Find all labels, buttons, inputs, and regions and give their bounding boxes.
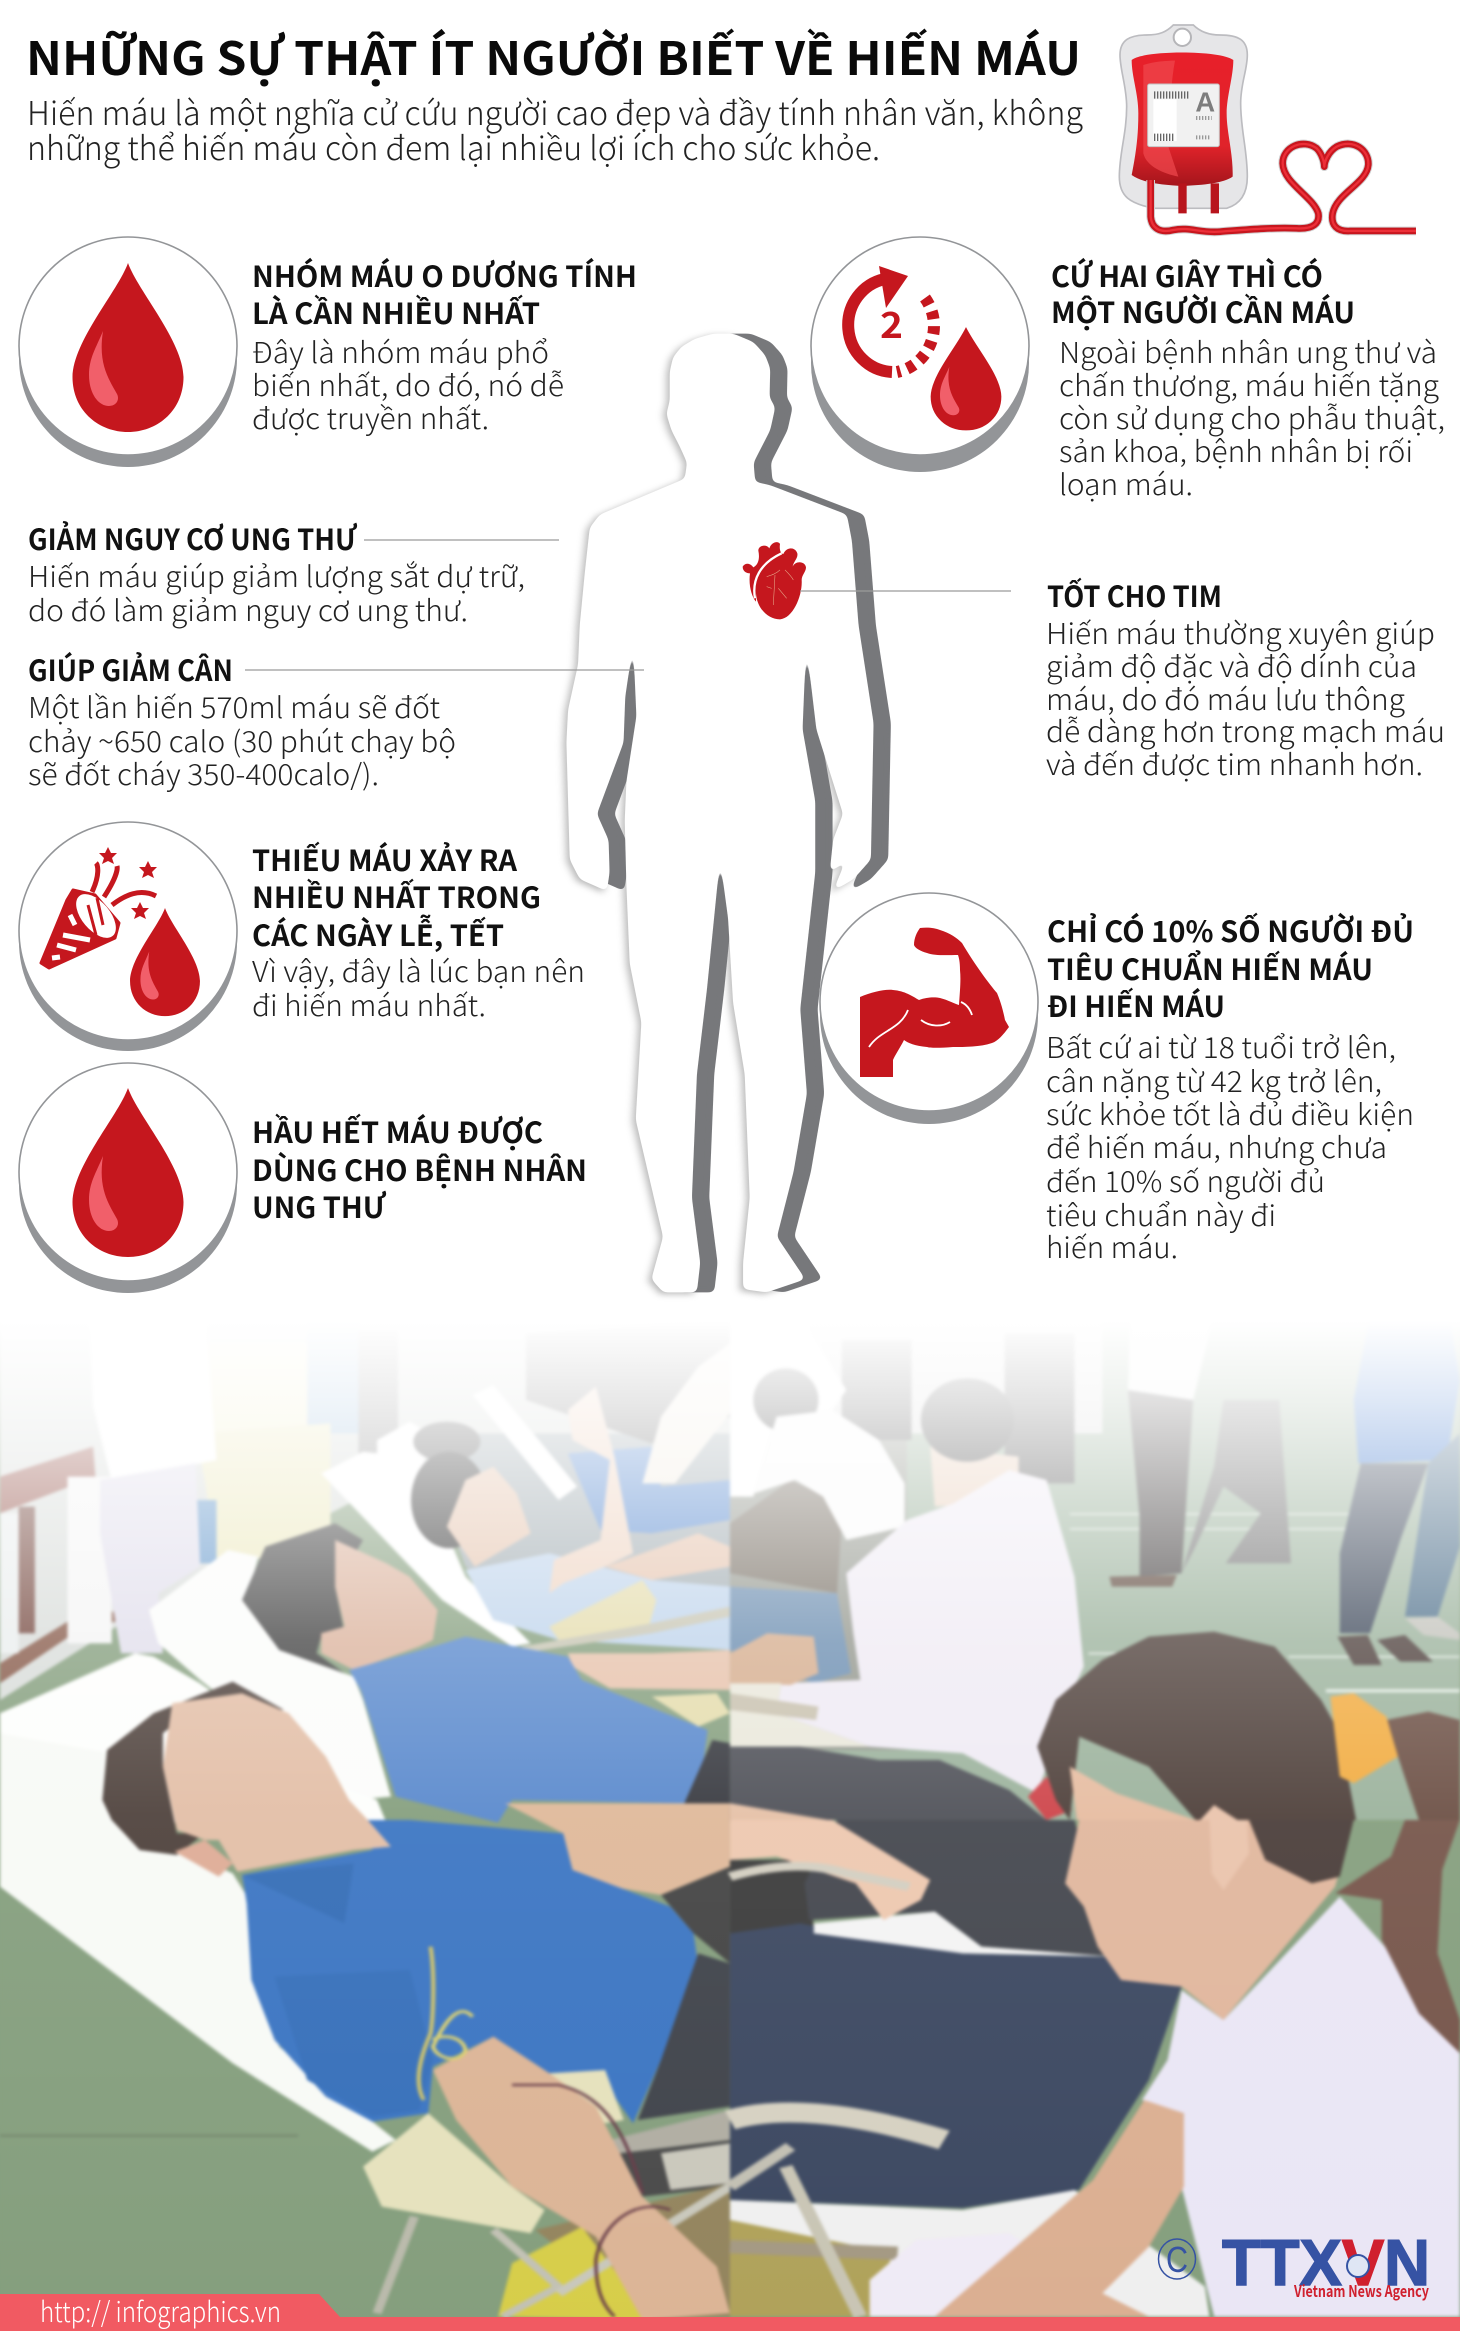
heading: UNG THƯ (252, 1185, 387, 1227)
panel: chỉ có 10% đủ tiêu chuẩn (820, 893, 1414, 1267)
heading (1051, 254, 1355, 332)
icon: two-second timer with drop: 2 (880, 297, 903, 349)
body text: loạn máu. (1059, 462, 1193, 504)
title: NHỮNG SỰ THẬT ÍT NGƯỜI BIẾT VỀ HIẾN MÁU (26, 23, 1081, 89)
body text: Vì vậy, đây là lúc bạn nên (252, 949, 585, 991)
body text: dễ dàng hơn trong mạch máu (1046, 709, 1445, 751)
body text: máu, do đó máu lưu thông (1046, 677, 1405, 719)
human body silhouette (563, 334, 891, 1294)
icon: heart organ (743, 542, 806, 619)
body text: được truyền nhất. (252, 396, 489, 438)
body text: sức khỏe tốt là đủ điều kiện (1046, 1092, 1414, 1134)
body text (252, 949, 585, 1025)
photo region: front donor with blue shirt (0, 1801, 732, 2317)
heading: CỨ HAI GIÂY THÌ CÓ (1051, 254, 1323, 296)
panel: giảm nguy cơ ung thư (28, 517, 525, 630)
heading: NHÓM MÁU O DƯƠNG TÍNH (252, 254, 637, 296)
panel: nhóm máu O dương tính (19, 237, 637, 467)
panel: thiếu máu ngày lễ tết (19, 822, 585, 1051)
photo fade overlay (0, 1300, 1460, 2331)
body text: đi hiến máu nhất. (252, 983, 486, 1025)
footer bar with website tab: http:// infographics.vn (40, 2291, 281, 2331)
heading: GIẢM NGUY CƠ UNG THƯ (28, 517, 358, 559)
subtitle (27, 87, 1083, 170)
logo: TTXVN Vietnam News Agency: C (1166, 2239, 1188, 2280)
logo: TTXVN Vietnam News Agency: TTXVN (1222, 2226, 1430, 2299)
heading: CÁC NGÀY LỄ, TẾT (252, 913, 504, 955)
body text: tiêu chuẩn này đi (1046, 1193, 1276, 1235)
body text (252, 330, 564, 438)
body text: giảm độ đặc và độ dính của (1046, 644, 1417, 686)
body text (1059, 330, 1445, 504)
panel: hầu hết máu cho bệnh nhân ung thư (19, 1063, 587, 1293)
body text: sản khoa, bệnh nhân bị rối (1059, 429, 1413, 471)
body text: và đến được tim nhanh hơn. (1046, 742, 1423, 784)
body text (28, 685, 456, 794)
leader lines (245, 540, 1011, 670)
body text: Hiến máu thường xuyên giúp (1046, 611, 1435, 653)
heading: LÀ CẦN NHIỀU NHẤT (252, 291, 540, 333)
icon: blood drop in circle (19, 1063, 237, 1293)
photo region: hall backdrop and standing nurse (0, 1350, 731, 1701)
heading: TIÊU CHUẨN HIẾN MÁU (1047, 947, 1373, 989)
body text (1046, 611, 1445, 784)
heading: TỐT CHO TIM (1047, 574, 1222, 616)
heading (1047, 909, 1414, 1026)
heading: MỘT NGƯỜI CẦN MÁU (1051, 290, 1355, 332)
photo: blood donors lying on beds (0, 1300, 1460, 2331)
heading (252, 1110, 587, 1227)
body text: Hiến máu giúp giảm lượng sắt dự trữ, (28, 554, 525, 596)
body text: Ngoài bệnh nhân ung thư và (1059, 330, 1437, 372)
photo region: nurse in foreground and pants (730, 1820, 1460, 2317)
icon: blood bag with heart tube: A (1195, 86, 1215, 117)
photo region: front donor head (102, 1682, 391, 1877)
photo region: far donors and second donor (0, 1387, 730, 1823)
heading: GIÚP GIẢM CÂN (28, 648, 233, 690)
body text: chảy ~650 calo (30 phút chạy bộ (28, 719, 456, 761)
heading: ĐI HIẾN MÁU (1047, 984, 1225, 1026)
heading: DÙNG CHO BỆNH NHÂN (252, 1148, 587, 1190)
body text: chấn thương, máu hiến tặng (1059, 363, 1439, 405)
body text: Bất cứ ai từ 18 tuổi trở lên, (1046, 1025, 1396, 1067)
body text: biến nhất, do đó, nó dễ (252, 363, 564, 405)
subtitle: Hiến máu là một nghĩa cử cứu người cao đẹp và đầy tính nhân văn, không (27, 87, 1083, 135)
photo region: nurse hair and scrunchie (1037, 1632, 1460, 1820)
footer bar with website tab (0, 2291, 1460, 2331)
panel: cứ hai giây (811, 237, 1445, 504)
body text (1046, 1025, 1414, 1267)
panel: giúp giảm cân (28, 648, 456, 794)
heading: NHIỀU NHẤT TRONG (252, 875, 541, 917)
heading: THIẾU MÁU XẢY RA (252, 838, 517, 880)
heading: CHỈ CÓ 10% SỐ NGƯỜI ĐỦ (1047, 909, 1414, 951)
body text: hiến máu. (1046, 1225, 1178, 1267)
photo region: right background, standing people and floor (730, 1300, 1460, 1820)
icon: party popper with drop (19, 822, 237, 1051)
icon: blood bag with heart tube (1119, 25, 1416, 232)
icon: two-second timer with drop (811, 237, 1029, 472)
body text: Đây là nhóm máu phổ (252, 330, 549, 372)
heading: HẦU HẾT MÁU ĐƯỢC (252, 1110, 543, 1152)
subtitle: những thể hiến máu còn đem lại nhiều lợi ích cho sức khỏe. (27, 122, 880, 170)
body text: Một lần hiến 570ml máu sẽ đốt (28, 685, 440, 727)
body text: sẽ đốt cháy 350-400calo/). (28, 752, 379, 794)
body text: còn sử dụng cho phẫu thuật, (1059, 396, 1445, 438)
heading (252, 254, 637, 333)
body text: để hiến máu, nhưng chưa (1046, 1125, 1387, 1167)
body text (28, 554, 525, 630)
body text: do đó làm giảm nguy cơ ung thư. (28, 588, 468, 630)
icon: flexed arm in circle (820, 893, 1038, 1124)
body text: đến 10% số người đủ (1046, 1159, 1325, 1201)
icon: blood drop in circle (19, 237, 237, 467)
body text: cân nặng từ 42 kg trở lên, (1046, 1059, 1382, 1101)
heading (252, 838, 541, 955)
panel: tốt cho tim (1046, 574, 1445, 784)
